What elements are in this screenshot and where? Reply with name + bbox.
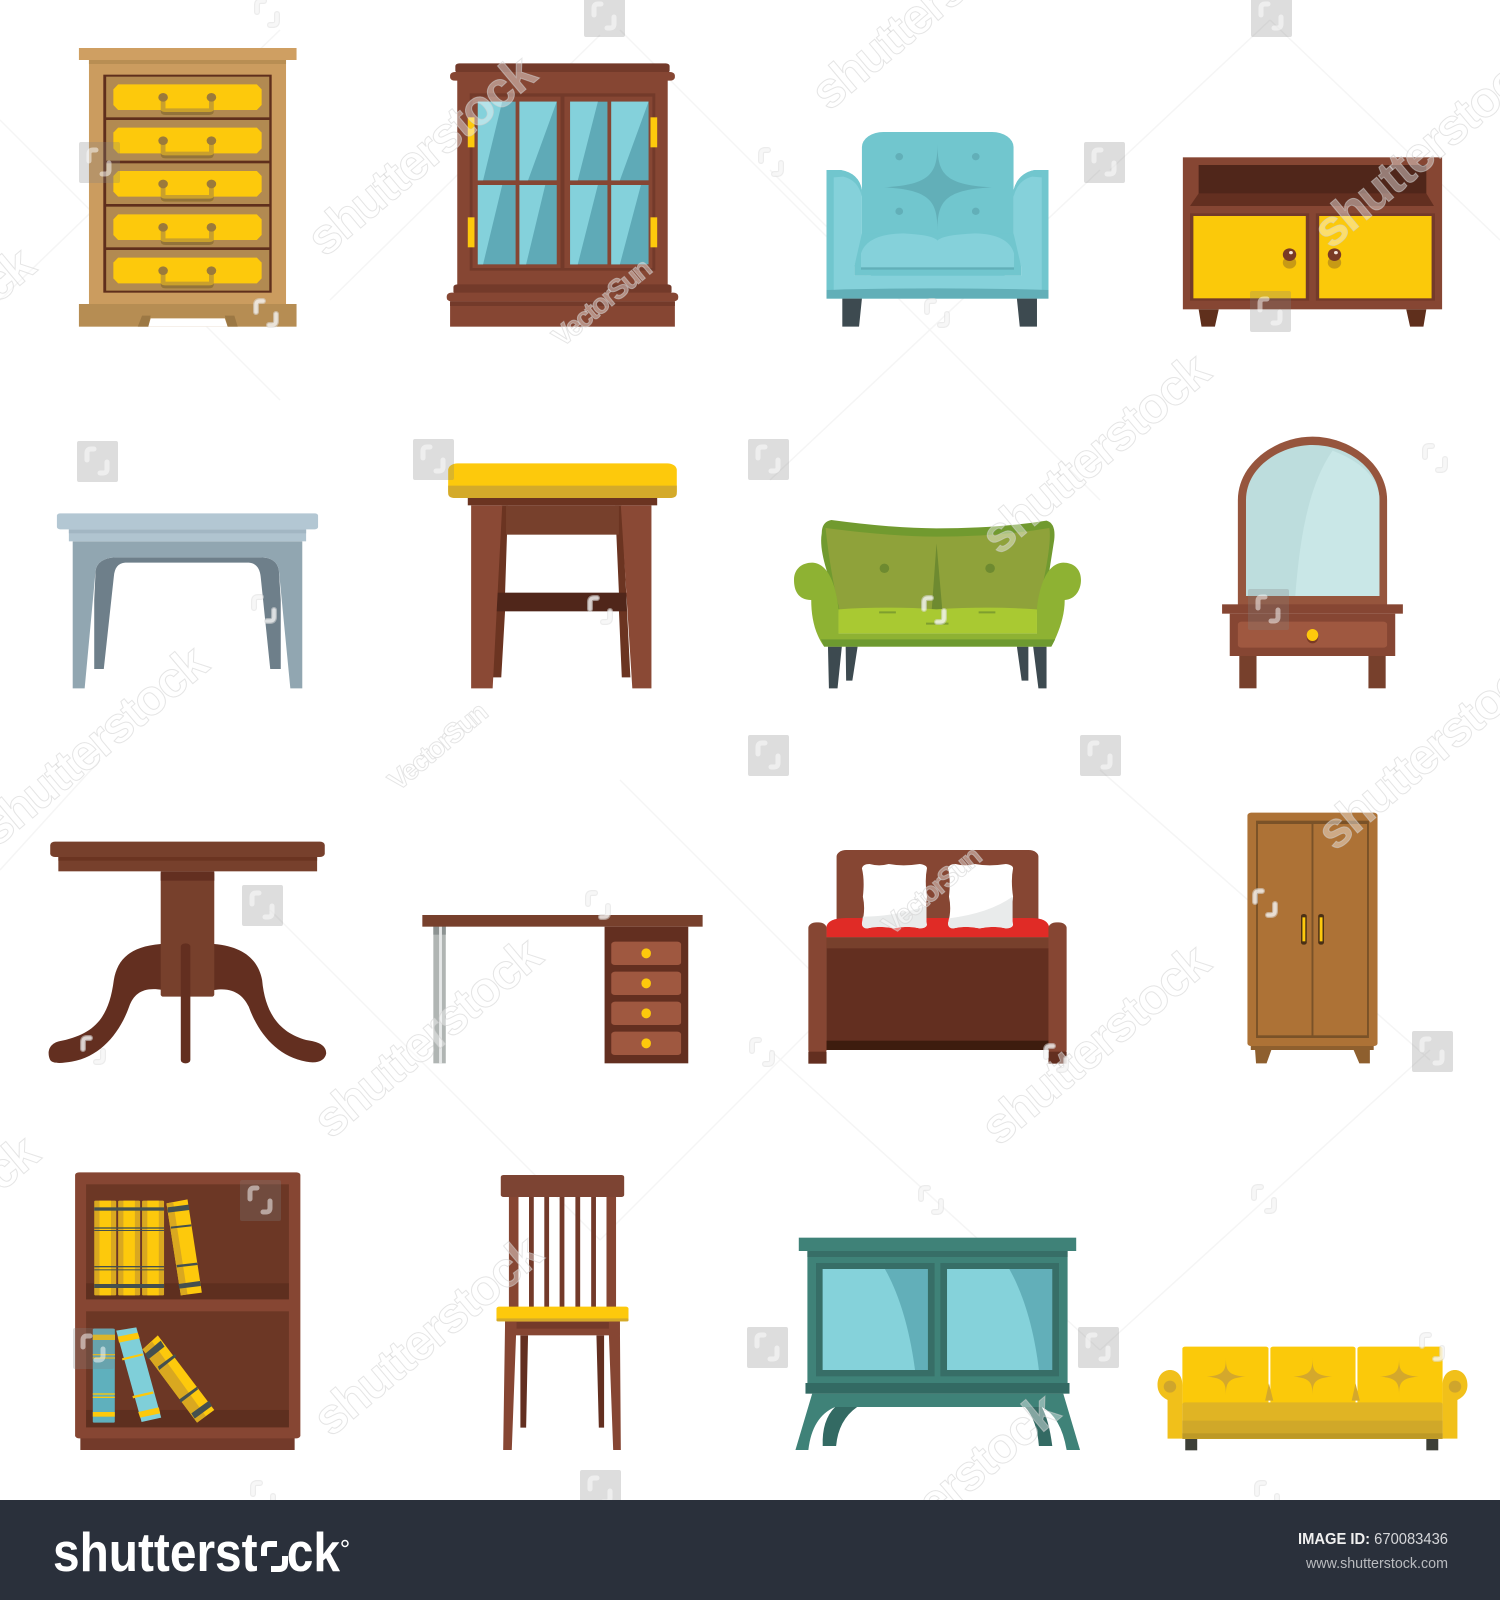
item: armchair bbox=[827, 132, 1048, 327]
watermark: shutterstock and VectorSun text: shutterstock bbox=[302, 925, 553, 1148]
item: chest of drawers bbox=[79, 48, 297, 327]
item: glass cabinet bbox=[447, 63, 678, 327]
item: desk with drawers bbox=[422, 915, 703, 1063]
watermark: shutterstock and VectorSun text: shutterstock bbox=[302, 1223, 553, 1446]
watermark: shutterstock and VectorSun text: VectorSun bbox=[546, 252, 658, 353]
item: bed bbox=[808, 850, 1067, 1064]
item: green loveseat bbox=[794, 520, 1081, 688]
watermark: shutterstock and VectorSun text: VectorSun bbox=[382, 696, 494, 797]
watermark: shutterstock and VectorSun text: VectorSun bbox=[876, 840, 988, 941]
item: teal cabinet bbox=[795, 1238, 1080, 1450]
item: round pedestal table bbox=[49, 842, 326, 1063]
footer bar bbox=[0, 1500, 1500, 1600]
item: vanity mirror table bbox=[1222, 437, 1403, 688]
footer website: www.shutterstock.com bbox=[1305, 1555, 1448, 1572]
item: stool bbox=[448, 463, 677, 688]
watermark: shutterstock and VectorSun text: shutterstock bbox=[296, 43, 547, 266]
books: blue and yellow lower shelf bbox=[93, 1327, 214, 1423]
item: bookshelf bbox=[75, 1172, 300, 1450]
watermark: shutterstock and VectorSun text: shutterstock bbox=[819, 1381, 1070, 1600]
footer image id: IMAGE ID: 670083436 bbox=[1298, 1531, 1448, 1548]
item: wardrobe bbox=[1247, 813, 1378, 1063]
item: wooden chair bbox=[496, 1175, 628, 1450]
item: yellow sofa bbox=[1158, 1347, 1467, 1450]
watermark: shutterstock and VectorSun text: shutterstock bbox=[970, 341, 1221, 564]
item: tv cabinet bbox=[1183, 157, 1442, 327]
books: yellow upper shelf bbox=[94, 1199, 202, 1295]
item: grey table bbox=[57, 513, 318, 688]
watermark: shutterstock and VectorSun text: shutterstock bbox=[970, 932, 1221, 1155]
footer logo: shutterstock bbox=[53, 1521, 340, 1583]
